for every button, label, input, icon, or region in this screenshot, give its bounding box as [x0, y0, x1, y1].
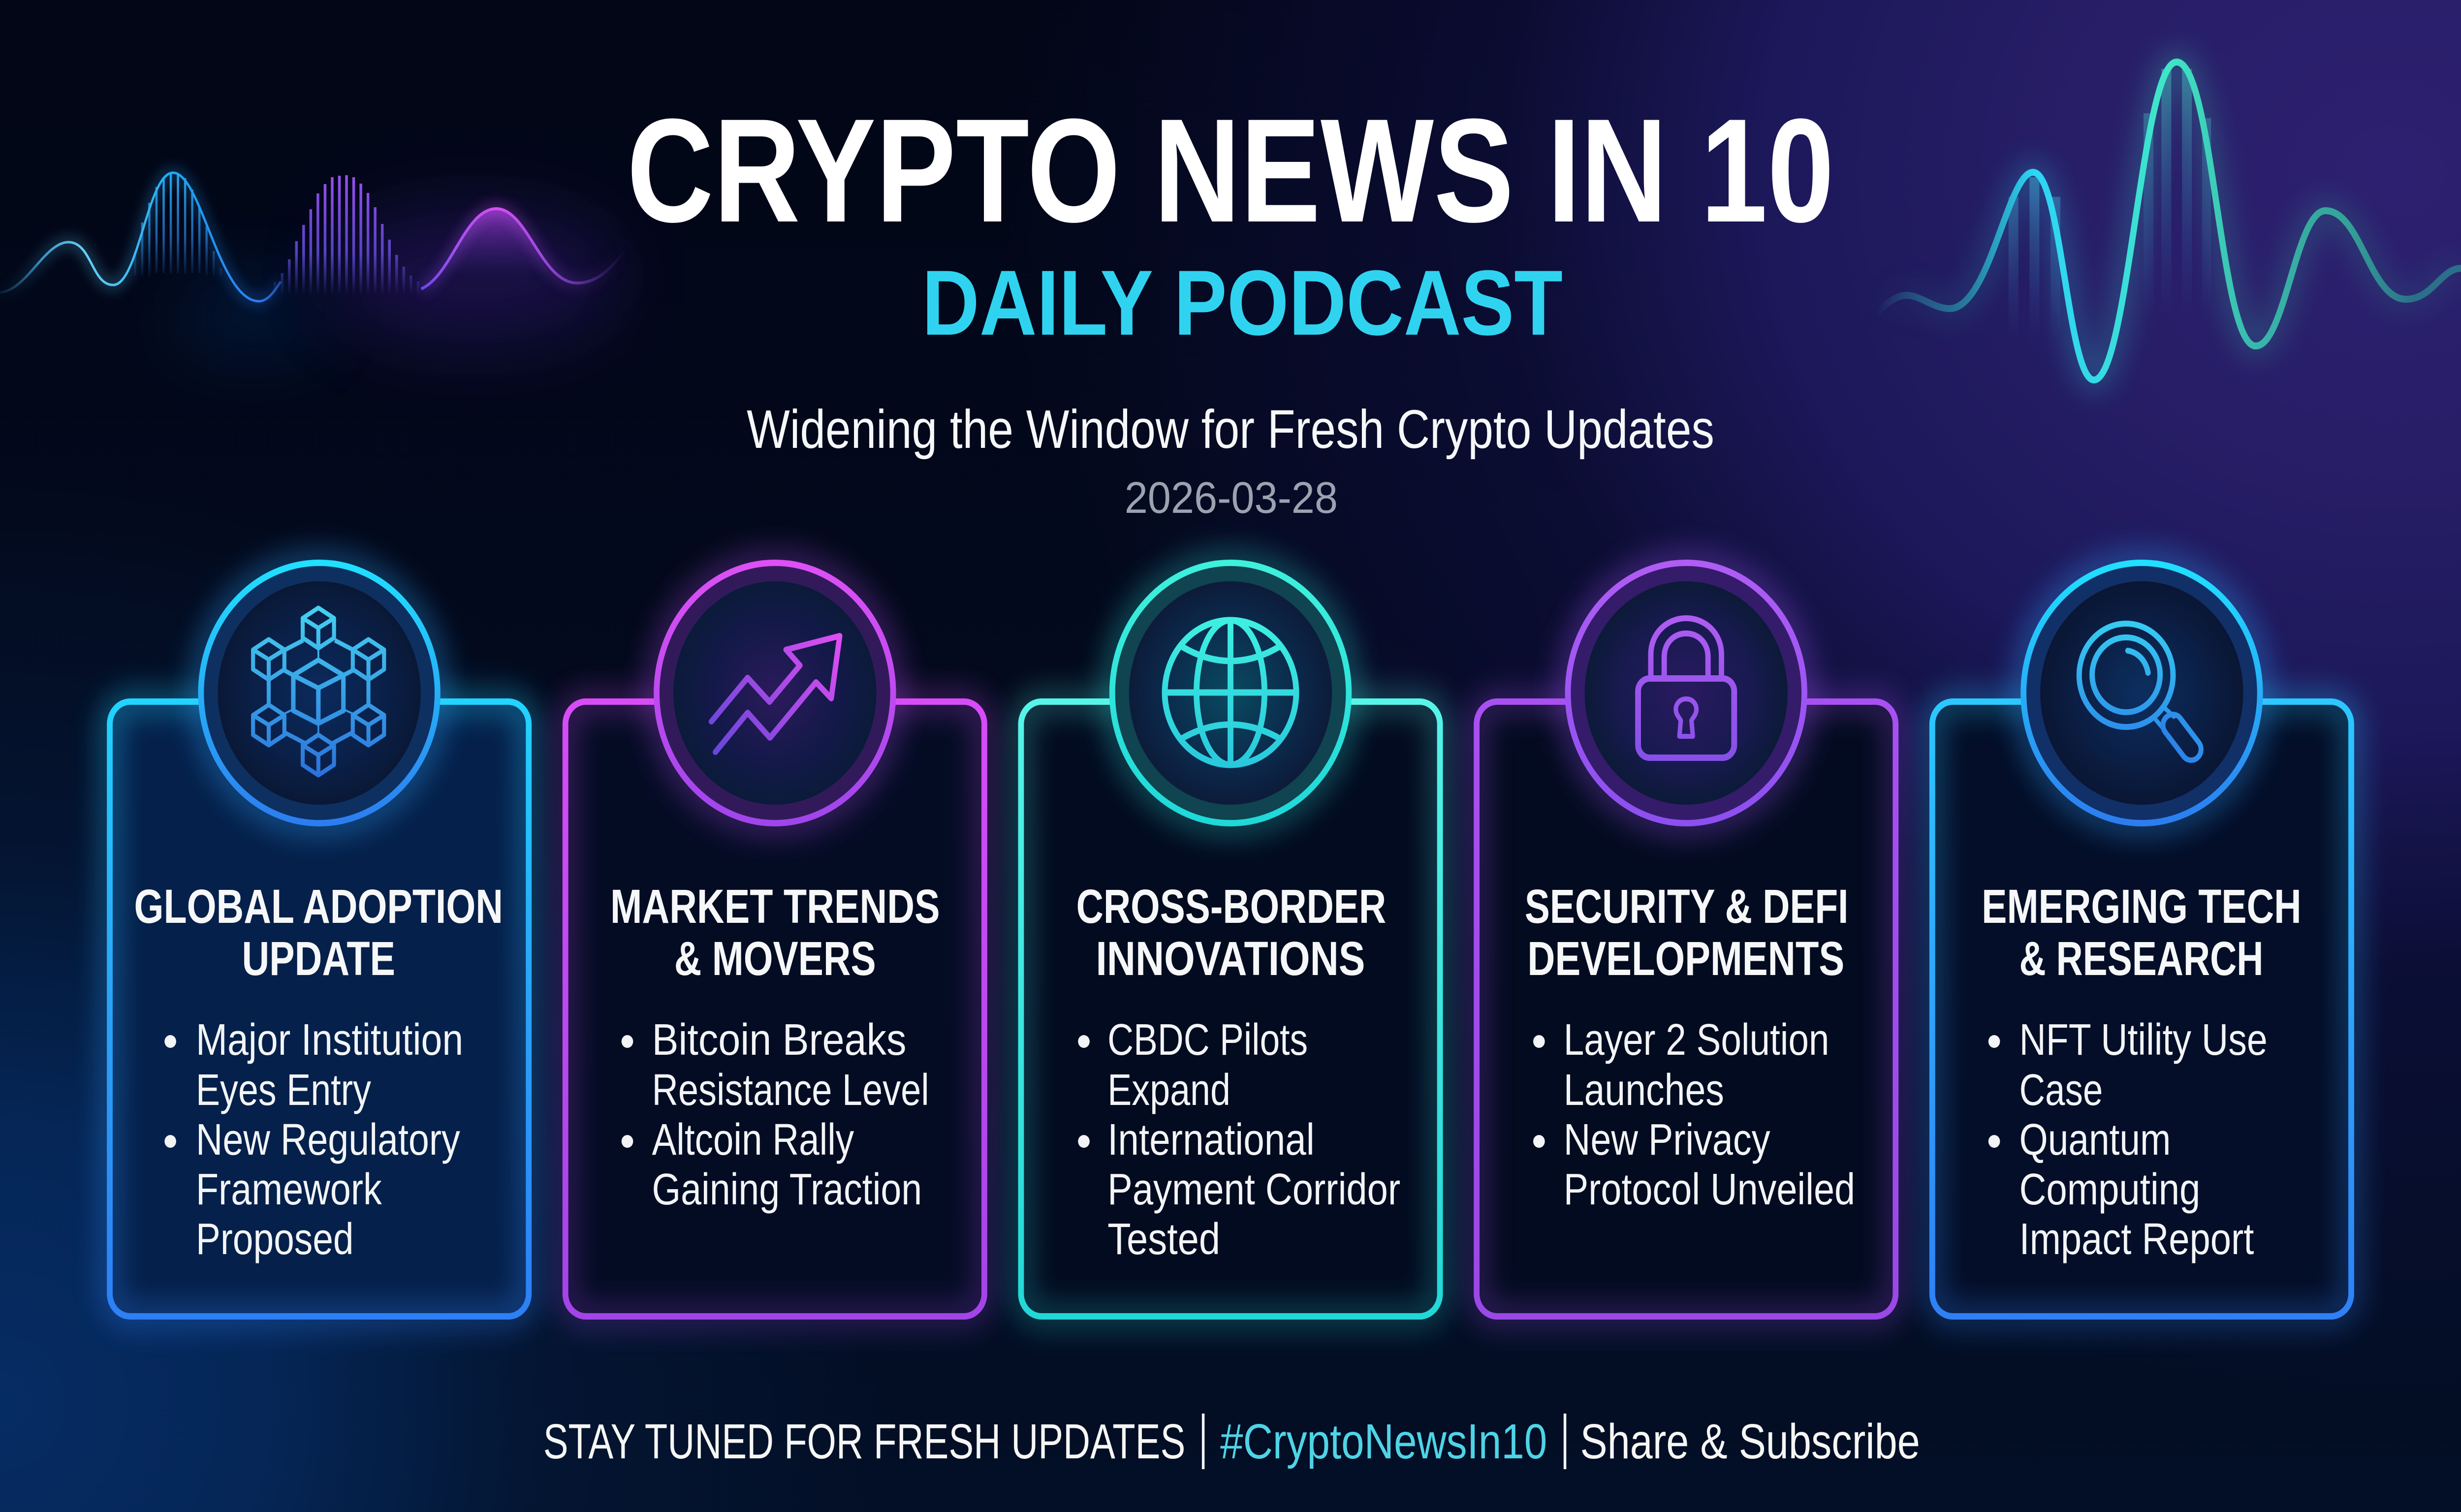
bullet list: Eyes Entry [196, 1065, 371, 1115]
waveform: right teal [1877, 62, 2461, 380]
bullet list: Protocol Unveiled [1564, 1165, 1855, 1214]
heading: SECURITY & DEFI [1525, 880, 1848, 933]
bullet list: Case [2019, 1065, 2103, 1115]
bullet list: Altcoin Rally [652, 1115, 854, 1165]
heading [1982, 880, 2302, 985]
heading [1076, 880, 1386, 985]
heading: EMERGING TECH [1982, 880, 2302, 933]
heading: MARKET TRENDS [610, 880, 940, 933]
bullet list: Tested [1107, 1214, 1220, 1264]
icon: padlock [1568, 563, 1804, 823]
icon: globe [1112, 563, 1349, 823]
panel: cross-border innovations [1021, 563, 1440, 1316]
tagline: Widening the Window for Fresh Crypto Updates [747, 400, 1714, 460]
title: CRYPTO NEWS IN 10 [627, 88, 1834, 253]
bullet list: Layer 2 Solution [1564, 1015, 1829, 1065]
bullet list: Major Institution [196, 1015, 463, 1065]
heading: & RESEARCH [2019, 932, 2263, 985]
footer call to action: #CryptoNewsIn10 [1220, 1415, 1547, 1469]
bullet list: New Regulatory [196, 1115, 460, 1165]
subtitle: daily podcast: DAILY PODCAST [922, 251, 1563, 355]
bullet list: Bitcoin Breaks [652, 1015, 906, 1065]
date: 2026-03-28 [1125, 473, 1338, 523]
bullet list: Payment Corridor [1107, 1165, 1400, 1214]
heading: CROSS-BORDER [1076, 880, 1386, 933]
bullet list: Proposed [196, 1214, 354, 1264]
bullet list [622, 1015, 929, 1214]
footer call to action: STAY TUNED FOR FRESH UPDATES [543, 1415, 1185, 1469]
panel: emerging tech and research [1932, 563, 2351, 1316]
bullet list: Computing [2019, 1165, 2200, 1214]
bullet list: NFT Utility Use [2019, 1015, 2268, 1065]
bullet list: Launches [1564, 1065, 1724, 1115]
bullet list: Impact Report [2019, 1214, 2254, 1264]
panel: security and defi developments [1477, 563, 1895, 1316]
icon: magnifying glass [2023, 563, 2260, 823]
bullet list [164, 1015, 463, 1264]
bullet list [1988, 1015, 2268, 1264]
panel: market trends and movers [566, 563, 984, 1316]
heading [134, 880, 503, 985]
bullet list: New Privacy [1564, 1115, 1770, 1165]
bullet list: Resistance Level [652, 1065, 929, 1115]
heading: & MOVERS [674, 932, 876, 985]
bullet list [1533, 1015, 1855, 1214]
heading: GLOBAL ADOPTION [134, 880, 503, 933]
icon: blockchain cubes [201, 563, 438, 823]
footer call to action [543, 1414, 1920, 1469]
bullet list: Framework [196, 1165, 382, 1214]
bullet list: Quantum [2019, 1115, 2171, 1165]
heading: INNOVATIONS [1096, 932, 1365, 985]
waveform: left blue and purple [0, 173, 625, 340]
bullet list: Expand [1107, 1065, 1230, 1115]
footer call to action: Share & Subscribe [1580, 1415, 1920, 1469]
bullet list: CBDC Pilots [1107, 1015, 1308, 1065]
bullet list [1078, 1015, 1400, 1264]
panel: global adoption update [110, 563, 529, 1316]
icon: rising trend arrow [657, 563, 893, 823]
bullet list: International [1107, 1115, 1315, 1165]
heading [1525, 880, 1848, 985]
bullet list: Gaining Traction [652, 1165, 922, 1214]
heading [610, 880, 940, 985]
heading: DEVELOPMENTS [1527, 932, 1844, 985]
heading: UPDATE [242, 932, 395, 985]
